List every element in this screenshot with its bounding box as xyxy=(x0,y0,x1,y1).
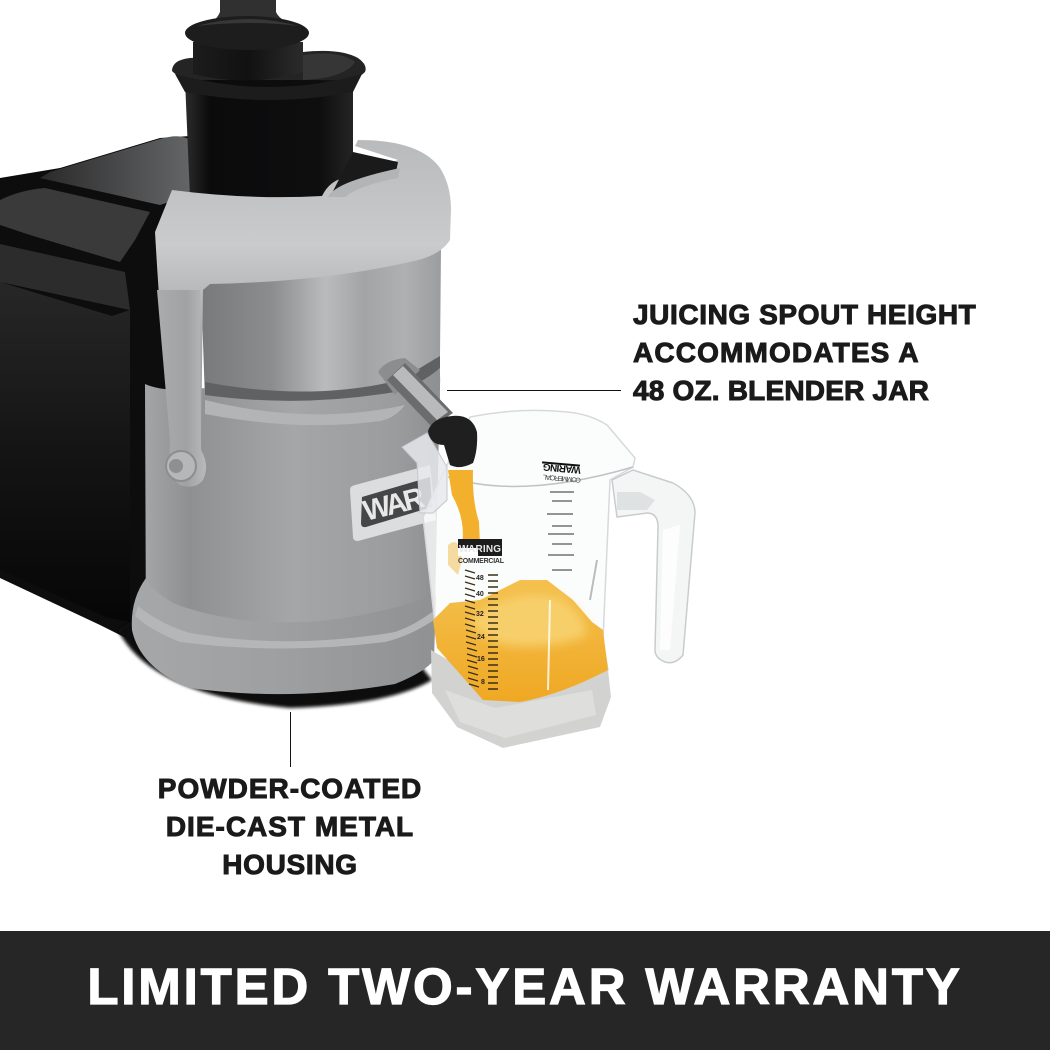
steel bowl xyxy=(200,250,441,400)
blender jar: 16 xyxy=(477,656,485,663)
splash guard xyxy=(402,433,447,513)
juice xyxy=(433,580,608,702)
collar and side arm xyxy=(155,140,451,487)
callout: housing: DIE-CAST METAL xyxy=(166,811,414,842)
logo badge xyxy=(350,465,436,541)
warranty banner: LIMITED TWO-YEAR WARRANTY xyxy=(87,958,963,1015)
front label xyxy=(458,539,502,556)
blender jar: 40 xyxy=(476,591,484,598)
callout: housing xyxy=(158,773,422,880)
blender jar xyxy=(402,410,695,748)
callout: spout height: JUICING SPOUT HEIGHT xyxy=(633,299,976,330)
callout: spout height: 48 OZ. BLENDER JAR xyxy=(633,375,929,406)
motor housing base xyxy=(132,356,440,694)
callout: housing: HOUSING xyxy=(222,849,358,880)
logo badge: WAR xyxy=(360,482,428,528)
leader line: spout xyxy=(447,390,621,392)
callout: spout height: ACCOMMODATES A xyxy=(633,337,920,368)
shadow under base xyxy=(118,610,432,708)
juice stream xyxy=(448,470,480,545)
blender jar: 48 xyxy=(476,575,484,582)
callout: spout height xyxy=(632,299,976,406)
blender jar: WARING xyxy=(459,544,501,555)
jar base xyxy=(431,650,611,748)
blender jar: 32 xyxy=(476,611,484,618)
blender jar: 8 xyxy=(481,679,485,686)
leader line: housing xyxy=(290,712,292,767)
juicing spout xyxy=(378,358,477,467)
callout: housing: POWDER-COATED xyxy=(158,773,422,804)
blender jar: COMMERCIAL xyxy=(458,558,505,565)
pusher and feed chute xyxy=(172,0,366,198)
ounce scale xyxy=(465,570,479,687)
blender jar: COMMERCIAL xyxy=(543,473,581,483)
back label: WARING xyxy=(542,461,581,475)
pulp container xyxy=(0,136,195,640)
blender jar: 24 xyxy=(477,634,485,641)
warranty banner xyxy=(0,931,1050,1050)
